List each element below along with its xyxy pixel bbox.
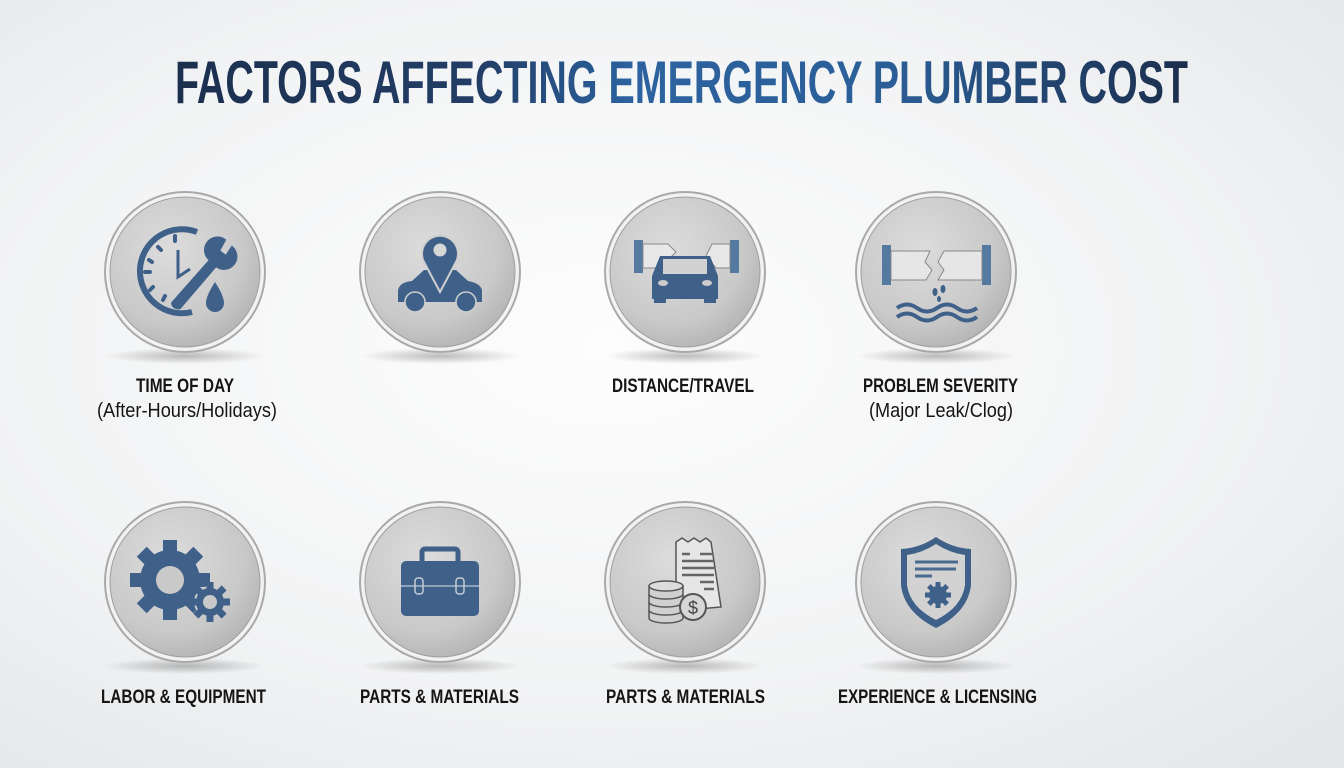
icon: receipt and coins (649, 538, 721, 623)
label: time of day: (After-Hours/Holidays) (97, 400, 277, 422)
icon: gears (113, 523, 238, 637)
icon: shield (901, 537, 971, 628)
icon: receipt and coins: $ (688, 598, 698, 618)
icon: broken pipe leak (882, 245, 991, 320)
label: parts 2: PARTS & MATERIALS (606, 687, 765, 708)
panel: experience (855, 501, 1017, 674)
panel: time of day (104, 191, 266, 364)
icon: clock wrench drop (140, 229, 236, 313)
panel: location (359, 191, 521, 364)
icon: briefcase (401, 549, 479, 616)
panel: problem severity (855, 191, 1017, 364)
label: experience: EXPERIENCE & LICENSING (838, 687, 1037, 708)
icon: pipes and car (634, 240, 739, 303)
label: problem severity: PROBLEM SEVERITY (863, 376, 1018, 397)
panel: distance (604, 191, 766, 364)
label: time of day: TIME OF DAY (136, 376, 234, 397)
icon: car with pin (398, 236, 482, 312)
label: parts 1: PARTS & MATERIALS (360, 687, 519, 708)
panel: parts toolbox (359, 501, 521, 674)
label: time of day (97, 376, 277, 422)
panel: parts receipt (604, 501, 766, 674)
label: problem severity (863, 376, 1018, 422)
panel: labor (104, 501, 266, 674)
label: distance: DISTANCE/TRAVEL (612, 376, 754, 397)
label: problem severity: (Major Leak/Clog) (869, 400, 1013, 422)
label: labor: LABOR & EQUIPMENT (101, 687, 266, 708)
